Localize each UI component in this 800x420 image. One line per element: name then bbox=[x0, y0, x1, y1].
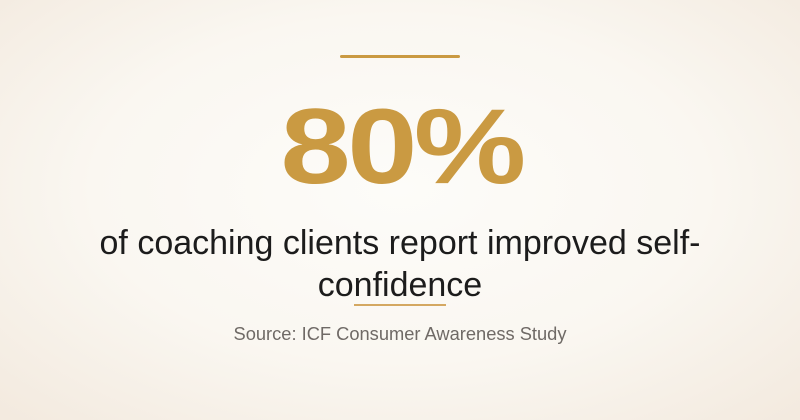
description text: of coaching clients report improved self-confidence bbox=[100, 224, 700, 304]
source note: Source: ICF Consumer Awareness Study bbox=[234, 323, 566, 344]
top accent line bbox=[340, 55, 460, 58]
big stat: 80%: 80% bbox=[281, 86, 523, 206]
underline accent bbox=[354, 304, 446, 306]
